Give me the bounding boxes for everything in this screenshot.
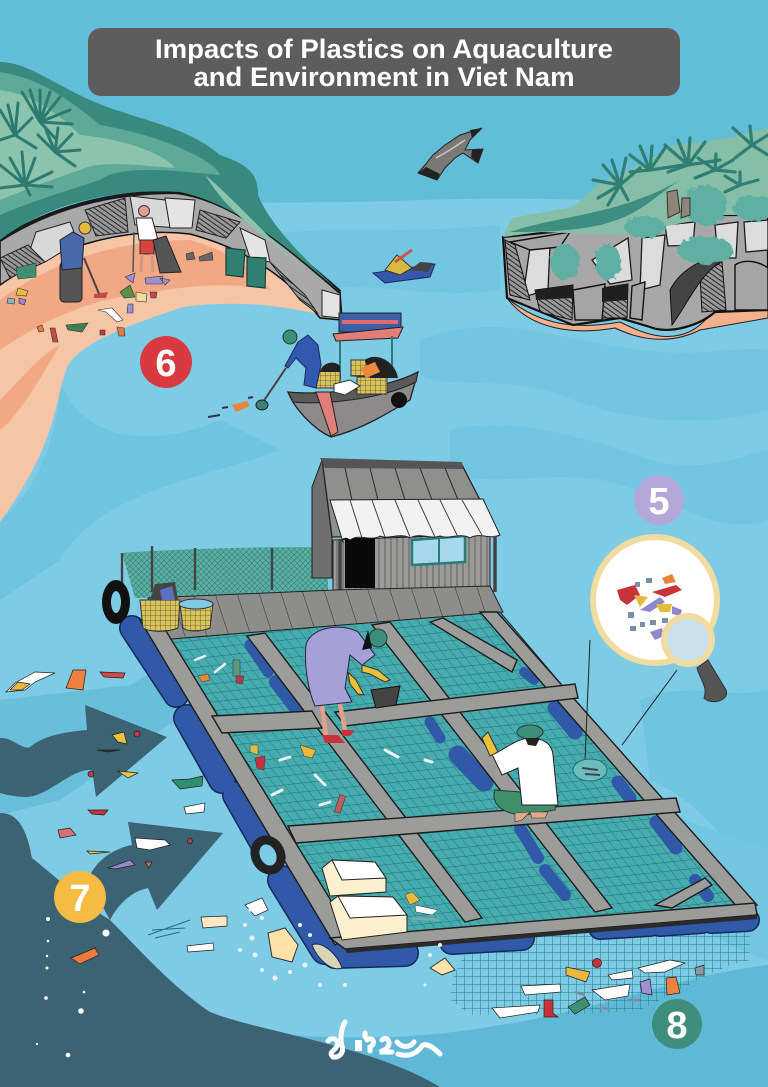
worker in blue <box>285 335 321 388</box>
worker with red shorts <box>133 206 181 273</box>
rock cliff <box>503 215 768 330</box>
logo <box>328 1022 440 1057</box>
coast shape <box>0 813 440 1087</box>
magnifier showing microplastics <box>573 537 727 781</box>
green hill <box>0 62 340 292</box>
cages with nets <box>160 612 748 942</box>
right island <box>503 126 768 339</box>
big circle <box>593 537 717 663</box>
badge 7 <box>54 871 106 923</box>
door <box>345 538 375 588</box>
palm fronds on hill <box>0 90 80 195</box>
broken foam debris and crumbs <box>238 908 455 987</box>
man in white shirt <box>482 725 558 822</box>
floating plastic waste on left <box>6 670 268 964</box>
beach cleanup scene <box>7 206 266 342</box>
tire on hull <box>391 392 407 408</box>
white bubbles on dark shape <box>36 917 110 1057</box>
tires <box>102 580 292 880</box>
badge 6 <box>140 336 192 388</box>
roof <box>322 459 498 537</box>
monkeys on rock <box>667 190 690 218</box>
recycling bins <box>226 248 266 288</box>
title: and Environment in Viet Nam <box>194 62 574 92</box>
side wall <box>312 460 332 578</box>
badge 8: 8 <box>666 1005 688 1047</box>
green plateau <box>503 128 768 237</box>
blue floats around raft <box>132 628 748 955</box>
palm fronds on right island <box>593 126 768 205</box>
badge 5: 5 <box>648 481 670 523</box>
canopy <box>333 327 403 341</box>
cross beams <box>212 684 757 949</box>
awning <box>330 499 500 542</box>
inner floats <box>250 645 708 896</box>
house <box>312 458 500 618</box>
grey bucket <box>371 686 400 708</box>
dark bottom-left land and arrows <box>0 705 440 1087</box>
shrubs on cliff <box>550 185 768 280</box>
title <box>88 28 680 96</box>
sinking net with litter beneath raft <box>451 925 750 1018</box>
beach litter <box>7 252 213 342</box>
litter on lower net <box>492 958 704 1018</box>
arrow upper <box>0 705 167 797</box>
litter and fish in cages <box>195 656 432 813</box>
styrofoam blocks <box>322 860 407 940</box>
litter in front cage <box>405 892 440 920</box>
handle <box>697 660 727 702</box>
microplastic specks <box>617 574 682 640</box>
title: Impacts of Plastics on Aquaculture <box>155 34 613 64</box>
badge 7: 7 <box>69 878 91 920</box>
posts <box>340 536 495 618</box>
fence net <box>122 547 328 598</box>
sand strip <box>507 298 768 339</box>
pointer lines <box>585 640 677 760</box>
baskets <box>140 582 213 631</box>
badge 5 <box>634 475 684 525</box>
window <box>412 536 465 565</box>
badge 6: 6 <box>155 343 177 385</box>
hull <box>288 372 418 437</box>
front wall <box>333 534 490 592</box>
left island with hill and beach <box>0 62 342 522</box>
kayak with person <box>373 250 435 283</box>
cargo on boat <box>316 371 340 388</box>
floating litter by net <box>256 400 268 410</box>
woman in purple robe <box>305 627 390 743</box>
boat with worker collecting floating plastic <box>208 313 418 437</box>
long beams <box>140 612 757 945</box>
deck <box>148 586 503 640</box>
lens <box>664 616 712 664</box>
bird <box>418 128 483 180</box>
floating fish farm <box>102 458 757 955</box>
sand beach <box>0 231 318 522</box>
banner <box>339 313 401 332</box>
badge 8 <box>652 999 702 1049</box>
cliff rocks <box>0 192 342 320</box>
worker in yellow hat <box>60 222 108 302</box>
arrow lower <box>88 822 223 920</box>
